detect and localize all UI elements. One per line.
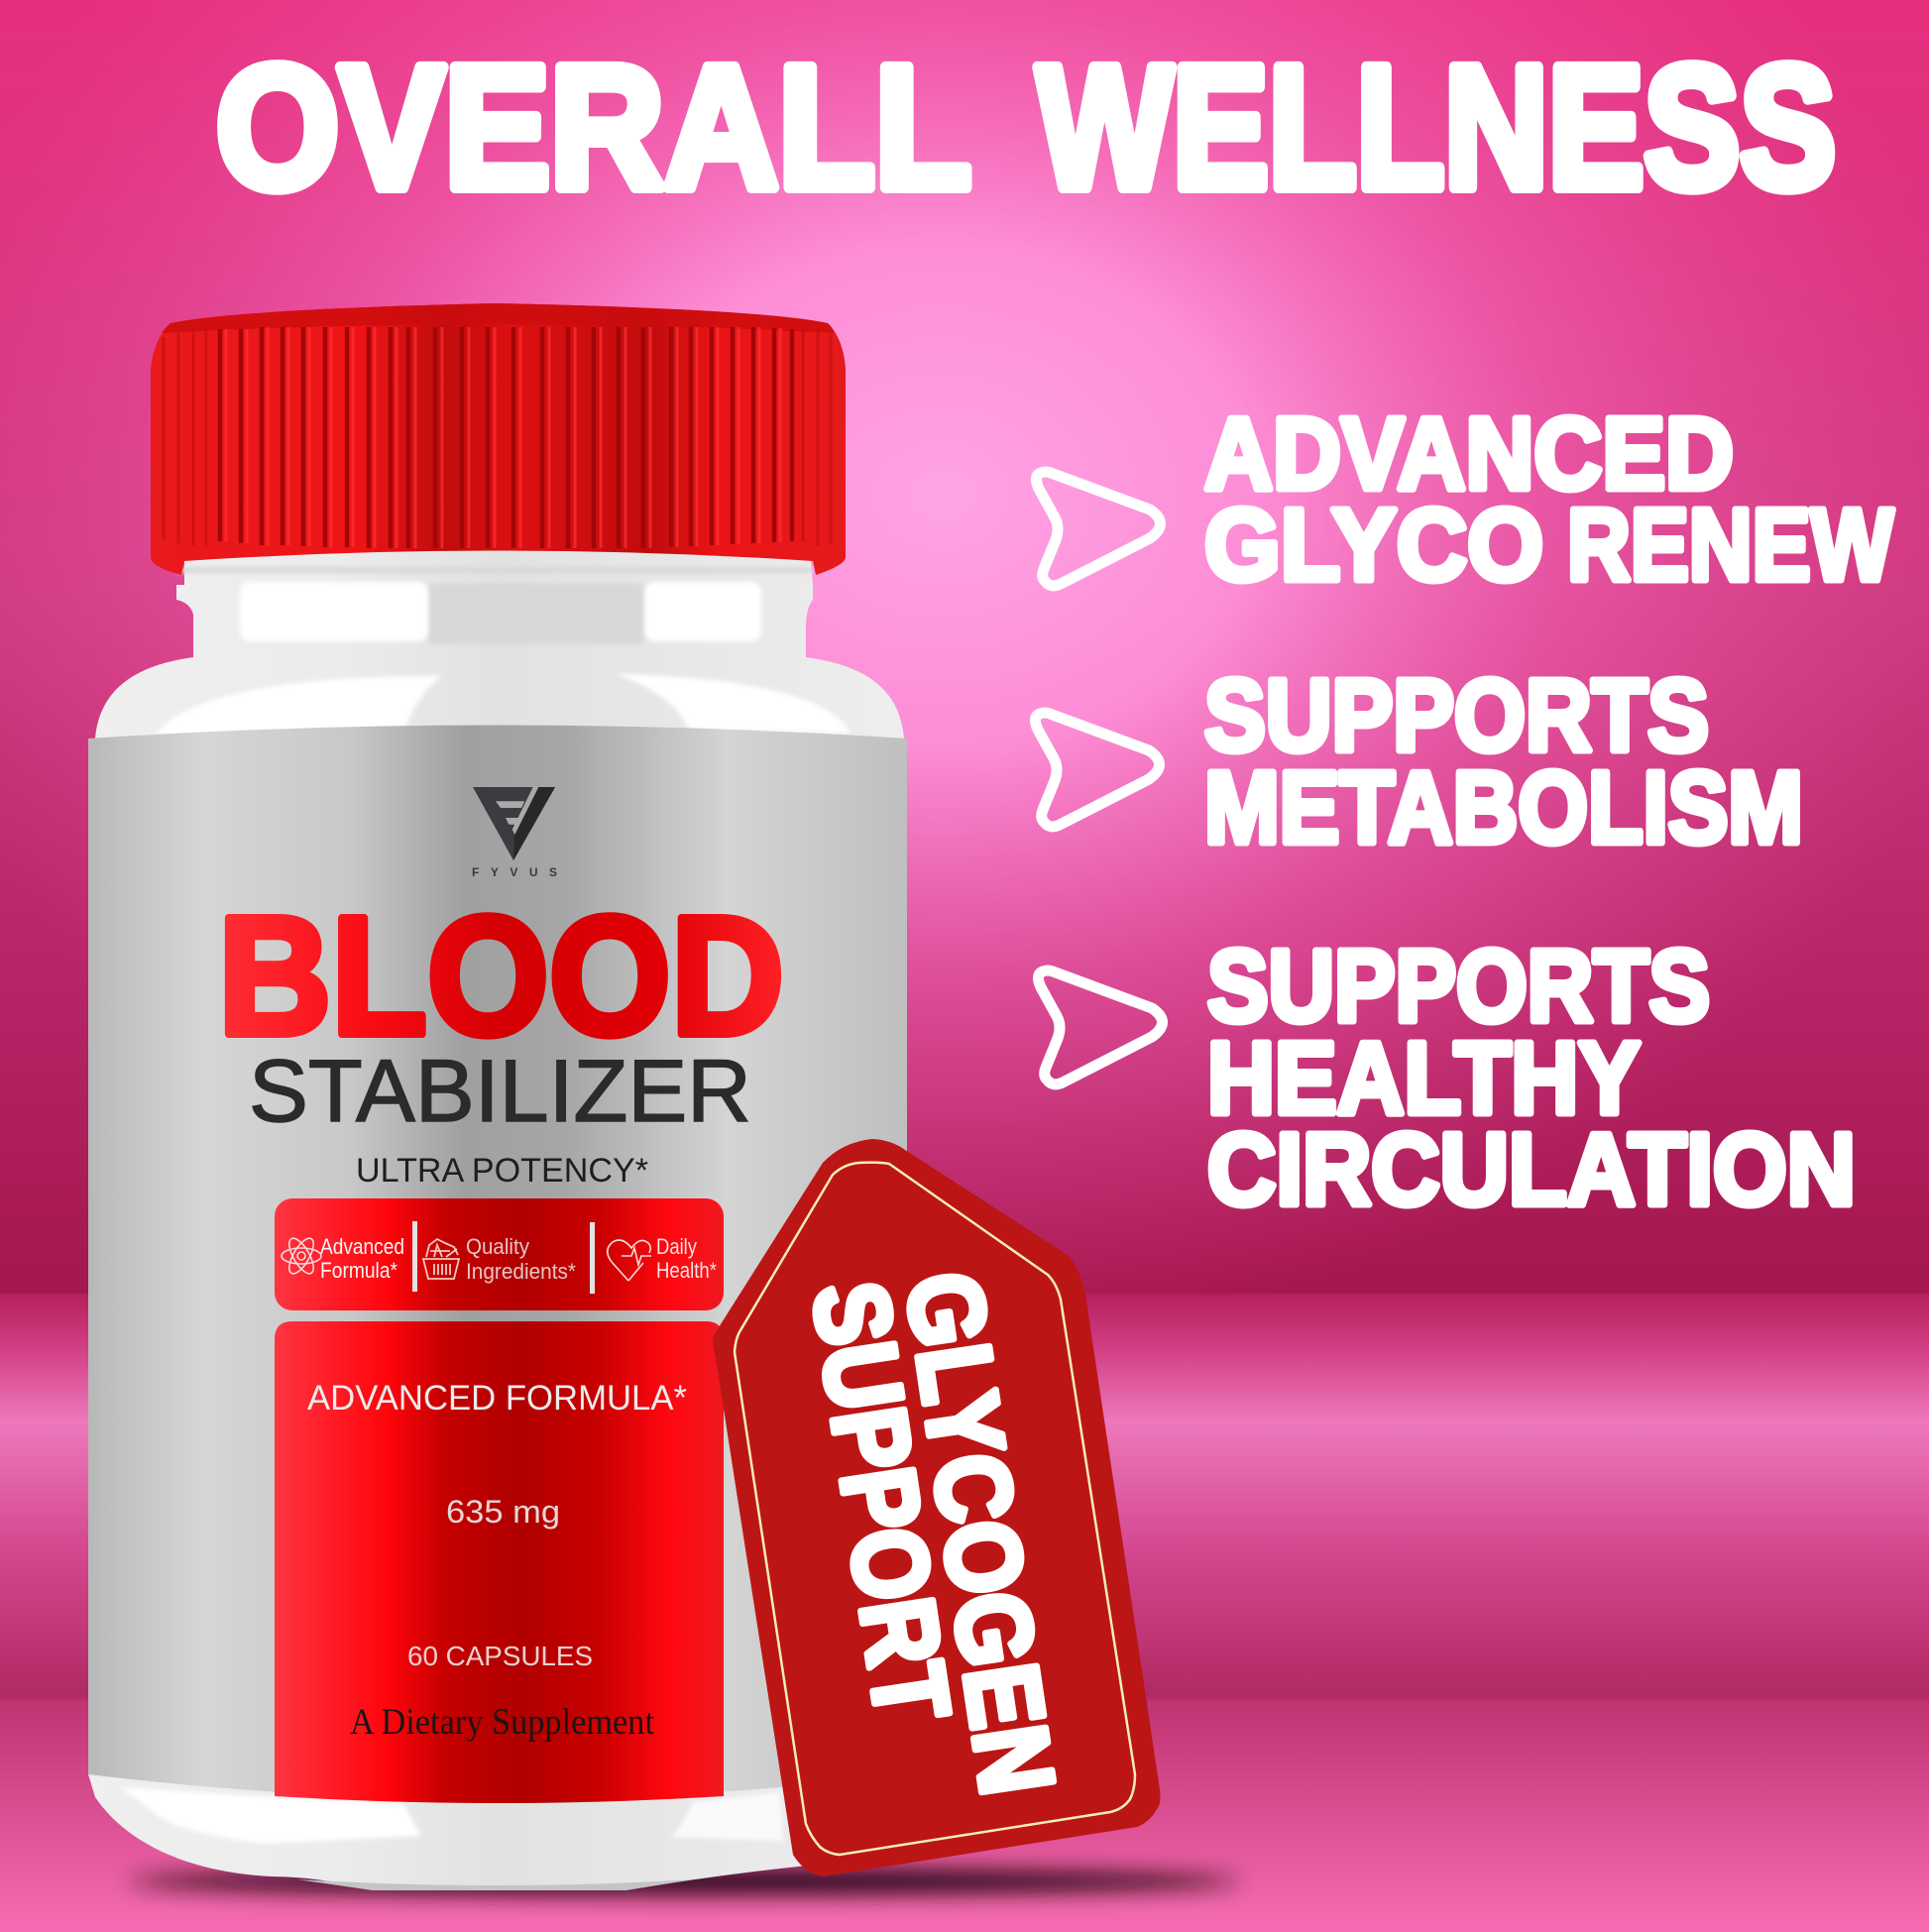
text: Daily Health: [656, 1234, 717, 1283]
text: Quality Ingredients: Quality: [466, 1234, 529, 1259]
text: capsule count: 60 CAPSULES: [407, 1641, 593, 1671]
feature text: Advanced Glyco Renew: [1204, 397, 1894, 602]
feature text: Supports Healthy Circulation: HEALTHY: [1207, 1021, 1641, 1135]
logo: FYVUS: [472, 787, 557, 879]
text: dietary supplement: A Dietary Supplement: [350, 1702, 655, 1743]
feature arrow 1: [1036, 472, 1160, 586]
title: OVERALL: [216, 31, 971, 225]
text: Advanced Formula: Advanced: [320, 1234, 404, 1259]
tag: glycogen support: GLYCOGEN: [883, 1265, 1076, 1802]
panel: benefits strip: [275, 1198, 724, 1310]
text: dosage: 635 mg: [446, 1494, 560, 1530]
icon: atom: [282, 1235, 321, 1277]
bottle body: [88, 540, 907, 1890]
product name: STABILIZER: STABILIZER: [249, 1041, 751, 1140]
feature text: Supports Metabolism: [1204, 658, 1803, 864]
logo: FYVUS: FYVUS: [472, 865, 557, 879]
text: Advanced Formula: [320, 1234, 404, 1283]
feature text: Supports Healthy Circulation: [1207, 929, 1856, 1226]
tag: glycogen support: [713, 1139, 1161, 1876]
feature text: Supports Metabolism: METABOLISM: [1204, 750, 1803, 864]
text: Quality Ingredients: Ingredients*: [466, 1259, 576, 1284]
text: Daily Health: Health*: [656, 1258, 717, 1283]
brand name: BLOOD: BLOOD: [218, 882, 784, 1071]
title: [216, 31, 1836, 225]
ULTRA POTENCY: ULTRA POTENCY*: [356, 1152, 648, 1190]
tag: glycogen support: SUPPORT: [790, 1275, 971, 1729]
cap: [151, 303, 846, 575]
text: Daily Health: Daily: [656, 1234, 697, 1259]
bottle foot: [297, 1879, 694, 1890]
background: pink wall: [0, 0, 1929, 1295]
feature arrow 2: [1035, 713, 1160, 827]
floor shadow: [129, 1869, 1239, 1894]
background: floor: [0, 1294, 1929, 1932]
feature text: Supports Healthy Circulation: CIRCULATION: [1207, 1112, 1856, 1226]
feature text: Supports Healthy Circulation: SUPPORTS: [1207, 929, 1710, 1043]
glass highlights: [120, 567, 851, 1844]
panel: formula details: [275, 1321, 724, 1803]
text: ADVANCED FORMULA: ADVANCED FORMULA*: [307, 1379, 687, 1418]
silver label: [88, 726, 907, 1799]
feature text: Advanced Glyco Renew: GLYCO: [1204, 488, 1543, 602]
feature text: Supports Metabolism: SUPPORTS: [1204, 658, 1709, 772]
text: Advanced Formula: Formula*: [320, 1258, 397, 1283]
product bottle: [88, 303, 907, 1890]
icon: heart with pulse: [608, 1240, 651, 1281]
feature arrow 3: [1038, 970, 1162, 1084]
text: Quality Ingredients: [466, 1234, 576, 1284]
icon: basket: [423, 1239, 459, 1279]
feature text: Advanced Glyco Renew: ADVANCED: [1204, 397, 1734, 511]
